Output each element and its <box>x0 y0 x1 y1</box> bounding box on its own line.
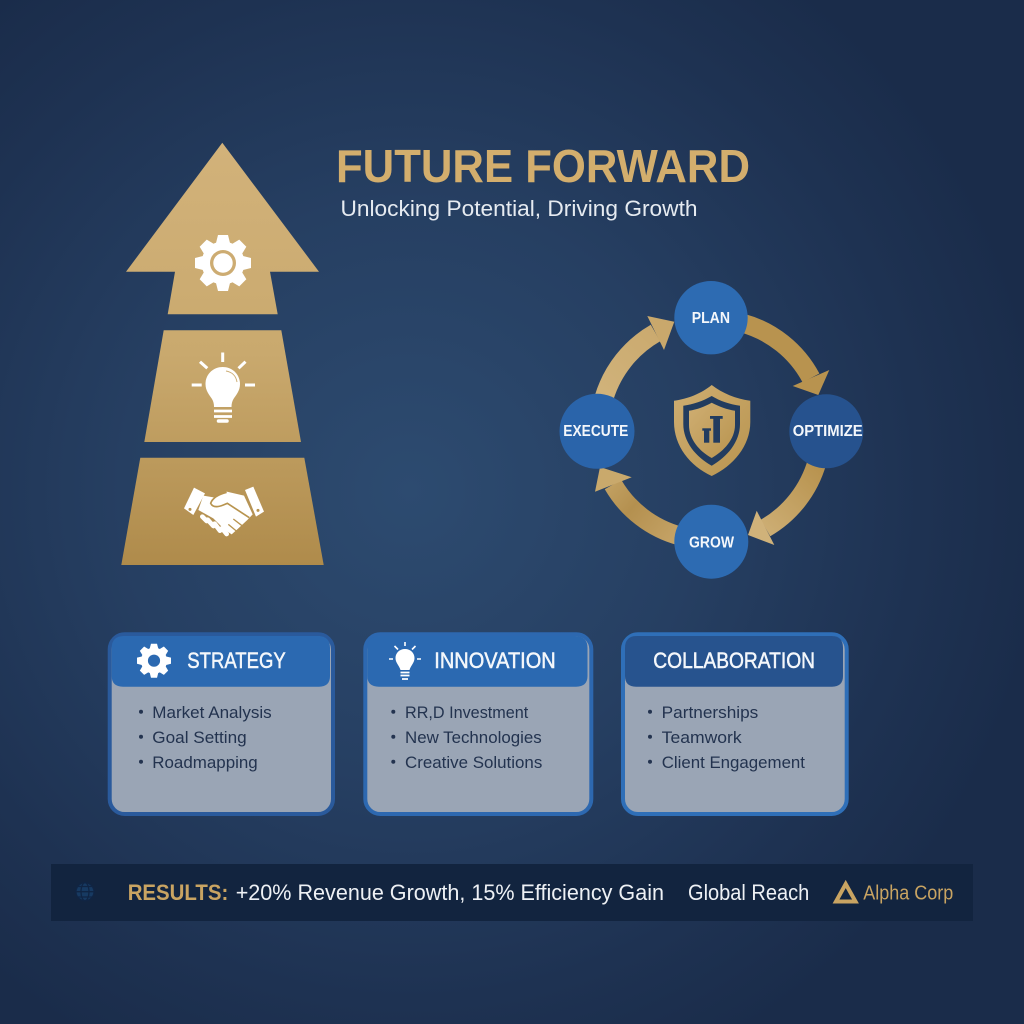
icon: globe <box>76 883 94 901</box>
panel: innovation <box>365 634 591 814</box>
icon: shield with bars <box>674 385 750 476</box>
node: execute: EXECUTE <box>563 423 629 440</box>
strategy list: Roadmapping <box>152 753 258 772</box>
cycle diagram <box>560 281 863 579</box>
title: FUTURE FORWARD <box>336 140 750 192</box>
innovation card body <box>365 634 591 814</box>
collaboration list: Teamwork <box>662 728 742 747</box>
node: plan <box>674 281 748 354</box>
innovation list: Creative Solutions <box>405 753 542 772</box>
subtitle: Unlocking Potential, Driving Growth <box>340 196 698 221</box>
node: grow: GROW <box>689 534 735 552</box>
strategy card body <box>110 634 333 814</box>
results metrics: +20% Revenue Growth, 15% Efficiency Gain <box>236 880 664 905</box>
arrow: grow to execute <box>595 467 680 536</box>
panel: strategy <box>110 634 333 814</box>
collaboration card body <box>623 634 847 814</box>
company name: Alpha Corp <box>863 882 953 904</box>
arrow: plan to optimize <box>742 323 829 395</box>
icon: light bulb <box>192 352 255 421</box>
icon: gear <box>195 235 251 291</box>
collaboration list: Client Engagement <box>662 753 805 772</box>
strategy list <box>139 703 272 772</box>
arrow: execute to plan <box>604 316 674 398</box>
node: optimize: OPTIMIZE <box>793 423 863 440</box>
collaboration list: Partnerships <box>662 703 758 722</box>
arrow: optimize to grow <box>748 462 817 545</box>
icon: handshake <box>184 487 264 534</box>
icon: gear <box>137 644 171 678</box>
collaboration heading: COLLABORATION <box>653 648 815 673</box>
collaboration header <box>625 636 843 687</box>
panel: collaboration <box>623 634 847 814</box>
global reach: Global Reach <box>688 880 809 905</box>
innovation heading: INNOVATION <box>434 648 556 673</box>
strategy list: Market Analysis <box>152 703 272 722</box>
strategy header <box>112 636 330 687</box>
results bar <box>51 864 973 921</box>
innovation list <box>391 703 542 772</box>
innovation list: New Technologies <box>405 728 542 747</box>
node: optimize <box>789 394 863 468</box>
node: grow <box>674 505 748 579</box>
collaboration list <box>648 703 805 772</box>
arrow bottom segment <box>121 458 324 565</box>
innovation header <box>367 636 588 687</box>
strategy heading: STRATEGY <box>187 648 286 673</box>
strategy list: Goal Setting <box>152 728 247 747</box>
innovation list: RR,D Investment <box>405 703 529 722</box>
node: plan: PLAN <box>692 310 730 327</box>
arrow middle segment <box>144 330 301 442</box>
arrow top segment <box>126 143 319 314</box>
node: execute <box>560 394 634 469</box>
icon: light bulb <box>389 642 421 679</box>
growth arrow pyramid <box>121 143 324 565</box>
icon: alpha corp logo <box>836 884 856 902</box>
results bar background <box>51 864 973 921</box>
results label: RESULTS: <box>128 880 228 905</box>
